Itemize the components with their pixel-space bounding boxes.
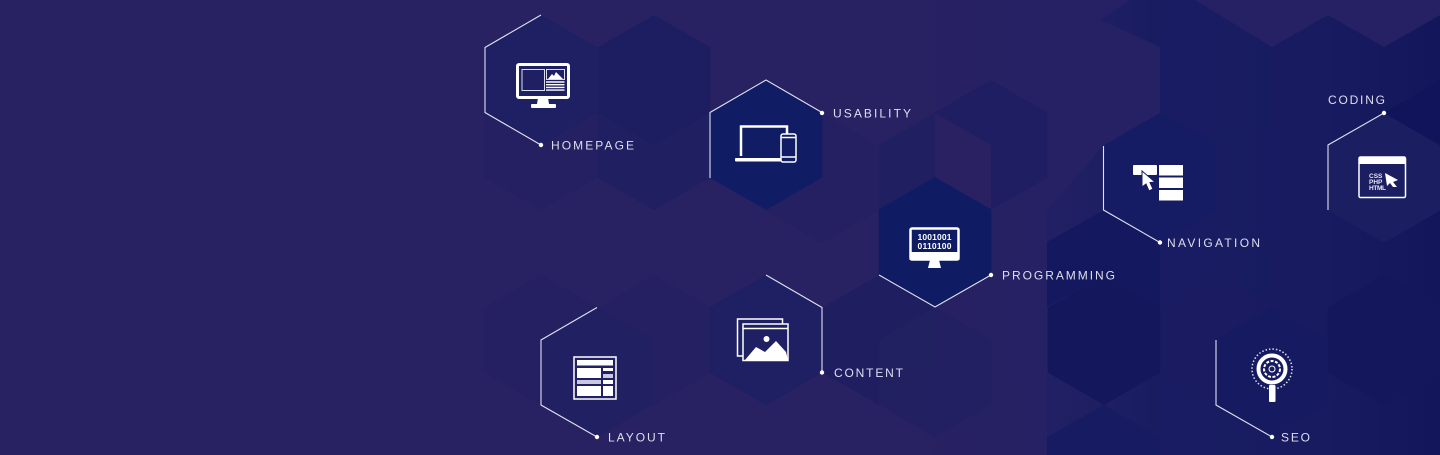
bottom blue hexagon [1047, 405, 1160, 455]
purple facet above programming [935, 113, 991, 210]
icon: programming monitor: 0110100 [918, 241, 952, 251]
icon: programming monitor: 1001001 [918, 232, 952, 242]
icon: code window: PHP [1369, 179, 1383, 186]
connector lines and dots [485, 15, 1384, 437]
line usability [710, 80, 822, 178]
line programming [879, 275, 991, 307]
pale hexagon behind coding [1328, 113, 1440, 243]
hexagon programming [879, 177, 991, 307]
label coding: CODING [1328, 93, 1385, 107]
icon: code window: CSS [1369, 173, 1383, 180]
hexagon below programming [823, 275, 935, 405]
icon: code window: HTML [1369, 185, 1386, 192]
icon: laptop and phone [735, 126, 796, 162]
icon: code window [1359, 157, 1406, 198]
dark hexagon, lower right [1328, 275, 1440, 405]
label homepage: HOMEPAGE [551, 138, 634, 152]
label navigation: NAVIGATION [1167, 236, 1260, 250]
hexagon navigation [1104, 113, 1216, 243]
line layout [541, 308, 597, 437]
hexagon second homepage [598, 15, 710, 145]
icon: seo magnifier gear [1252, 349, 1292, 402]
label usability: USABILITY [833, 106, 911, 120]
faint hexagon, bottom centre [879, 307, 991, 437]
line homepage [485, 15, 541, 145]
hexagon homepage [485, 15, 597, 145]
line content [766, 275, 822, 372]
line seo [1216, 340, 1272, 437]
icon: navigation menu [1133, 165, 1183, 200]
icon: programming monitor [910, 228, 960, 268]
icon: page layout [574, 357, 616, 399]
label seo: SEO [1281, 430, 1310, 444]
dark facet, right edge [1384, 80, 1440, 145]
icon: homepage monitor [518, 64, 568, 108]
background hexagon pattern [485, 0, 1440, 455]
hexagon seo [1216, 307, 1328, 437]
dark hexagon, centre right [1048, 275, 1160, 405]
label programming: PROGRAMMING [1002, 268, 1115, 282]
hexagon content [710, 275, 822, 405]
blue field, right side [1047, 0, 1440, 455]
label layout: LAYOUT [608, 430, 666, 444]
hexagon right of programming [935, 80, 1047, 210]
faint hexagons, centre [485, 80, 878, 405]
pale hexagon behind seo [1161, 275, 1273, 405]
line coding [1328, 113, 1384, 210]
label content: CONTENT [834, 366, 904, 380]
hexagon layout [541, 307, 653, 437]
hexagon usability [710, 80, 822, 210]
icon: image windows [738, 319, 788, 360]
hexagon lower homepage [598, 80, 710, 210]
endpoint dots [539, 111, 1386, 439]
line navigation [1104, 146, 1160, 242]
